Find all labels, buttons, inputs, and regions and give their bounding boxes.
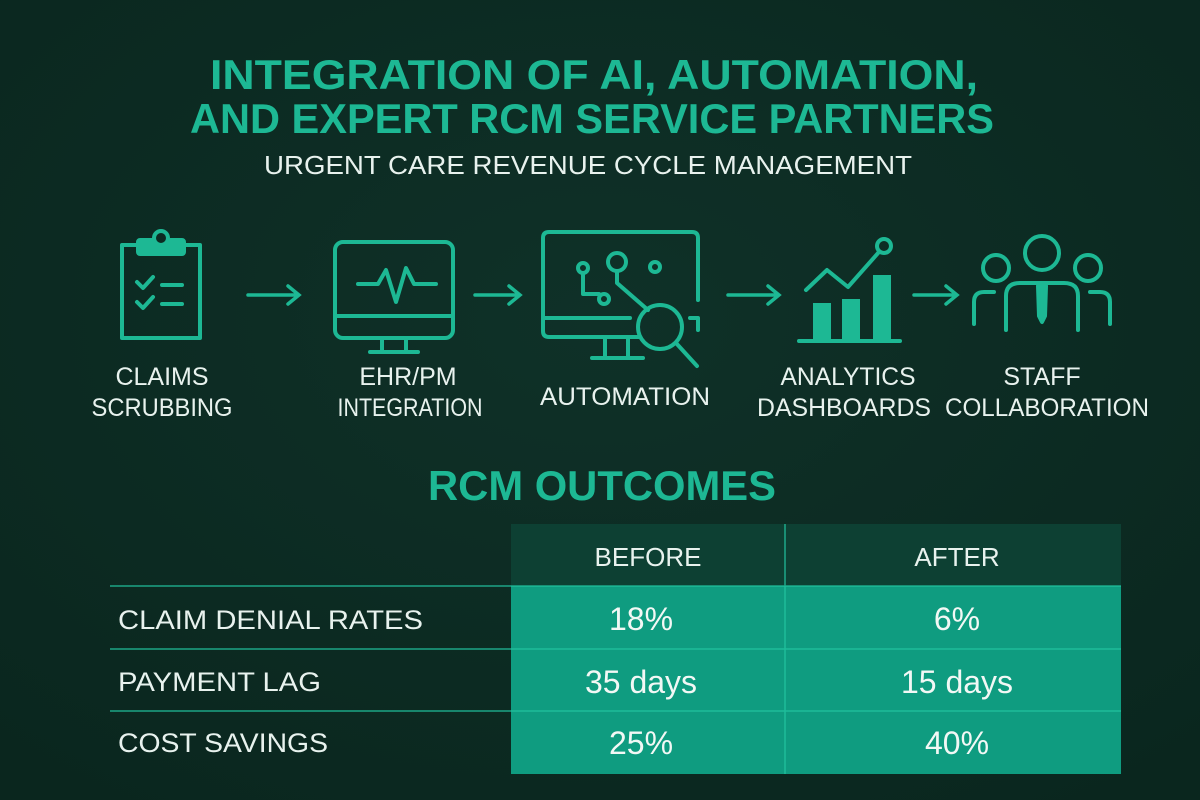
values: 35 days (585, 664, 697, 700)
icon: automation monitor with magnifier (543, 232, 698, 366)
title: AND EXPERT RCM SERVICE PARTNERS (190, 95, 994, 142)
subtitle: URGENT CARE REVENUE CYCLE MANAGEMENT (264, 150, 912, 180)
label: staff collaboration: STAFF (1003, 363, 1081, 391)
label: claims scrubbing: SCRUBBING (92, 394, 232, 422)
row labels: COST SAVINGS (118, 728, 328, 758)
label: automation: AUTOMATION (540, 383, 710, 411)
process flow (92, 231, 1149, 422)
label: ehr/pm integration: INTEGRATION (338, 394, 482, 422)
table header: AFTER (914, 542, 1000, 572)
row labels (118, 605, 423, 758)
label: claims scrubbing: CLAIMS (115, 363, 209, 391)
arrow 3 (728, 286, 779, 304)
label: ehr/pm integration (338, 363, 482, 422)
label: staff collaboration: COLLABORATION (945, 394, 1149, 422)
label: claims scrubbing (92, 363, 232, 422)
title (190, 51, 994, 142)
table: outcomes (110, 524, 1121, 774)
arrow 2 (475, 286, 520, 304)
table header (595, 542, 1000, 572)
label: analytics dashboards (757, 363, 931, 422)
arrow 4 (914, 286, 957, 304)
icon: staff people (974, 236, 1110, 330)
icon: monitor with heartbeat (335, 242, 453, 352)
row labels: CLAIM DENIAL RATES (118, 605, 423, 635)
values: 40% (925, 725, 989, 761)
label: staff collaboration (945, 363, 1149, 422)
arrow 1 (248, 286, 299, 304)
label: ehr/pm integration: EHR/PM (359, 363, 457, 391)
title: INTEGRATION OF AI, AUTOMATION, (210, 51, 978, 98)
icon: analytics chart (799, 239, 900, 341)
label: analytics dashboards: DASHBOARDS (757, 394, 931, 422)
row labels: PAYMENT LAG (118, 667, 321, 697)
table header: BEFORE (595, 542, 701, 572)
values: 18% (609, 601, 673, 637)
label: analytics dashboards: ANALYTICS (780, 363, 916, 391)
values (585, 601, 1013, 761)
values: 25% (609, 725, 673, 761)
icon: clipboard (122, 231, 200, 338)
values: 6% (934, 601, 980, 637)
heading: rcm outcomes: RCM OUTCOMES (428, 462, 776, 509)
values: 15 days (901, 664, 1013, 700)
